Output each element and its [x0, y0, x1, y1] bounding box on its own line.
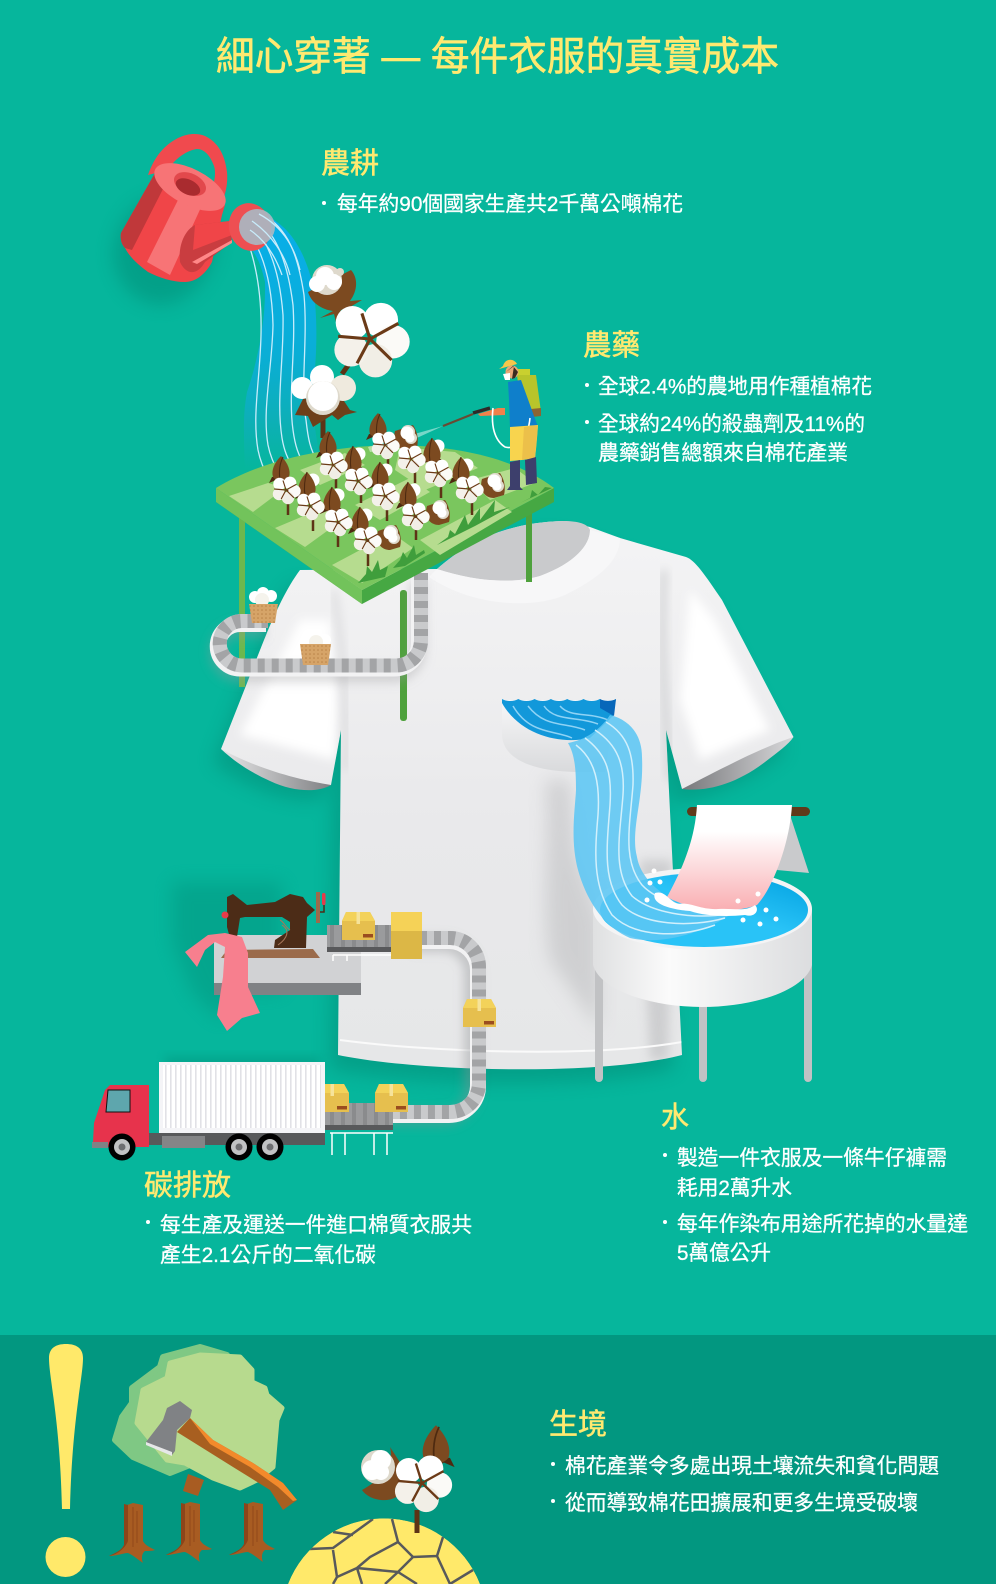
section: pesticide text [583, 329, 872, 465]
icon: exclamation mark [46, 1344, 86, 1577]
axe handle [177, 1418, 297, 1510]
cotton boll lower [291, 365, 357, 427]
right sleeve cuff [682, 737, 794, 790]
icon: stumps [109, 1502, 275, 1563]
spray mist [368, 426, 443, 452]
icon: cracked earth [288, 1518, 480, 1584]
cotton plants in field [269, 413, 505, 566]
section: carbon text: 碳排放 [144, 1169, 231, 1202]
section: habitat text: 棉花產業令多處出現土壤流失和貧化問題 [565, 1455, 939, 1478]
back cloth flap [777, 815, 809, 873]
can handle [148, 134, 227, 200]
section: habitat text: 從而導致棉花田擴展和更多生境受破壞 [565, 1492, 918, 1515]
grass tufts [358, 487, 552, 583]
icon: cotton on earth [361, 1425, 455, 1533]
section: farming text: 每年約90個國家生產共2千萬公噸棉花 [337, 193, 683, 216]
large cotton plants [291, 265, 410, 438]
section: water text: 水 [661, 1101, 689, 1134]
section: farming text [321, 147, 683, 216]
foam [644, 868, 778, 926]
belt and boxes top [327, 912, 422, 961]
sewing table and machine [172, 882, 361, 1022]
rod [687, 807, 810, 816]
pocket with water [502, 699, 616, 772]
icon: watering can [113, 134, 300, 305]
field stripes [229, 447, 535, 583]
box on vertical belt [463, 999, 496, 1027]
can body [121, 173, 225, 282]
can rose [224, 198, 276, 256]
basket 2 [300, 630, 331, 665]
truck [92, 1056, 325, 1160]
field platform [216, 445, 554, 604]
field legs [239, 505, 532, 721]
conveyor: packing [385, 938, 479, 1118]
section: carbon text: 每生產及運送一件進口棉質衣服共 [160, 1214, 472, 1237]
pink cloth on machine [185, 933, 260, 1031]
basin legs [595, 955, 812, 1082]
t-shirt [213, 521, 794, 1083]
water stream from pocket [568, 715, 733, 940]
section: pesticide text: 全球2.4%的農地用作種植棉花 [598, 376, 872, 398]
farmer [443, 360, 541, 490]
section: water text [661, 1101, 968, 1265]
section: habitat text: 生境 [549, 1408, 607, 1441]
bottom band [0, 1335, 996, 1584]
wash basin [593, 807, 812, 1082]
left sleeve cuff [221, 749, 331, 790]
section: water text: 5萬億公升 [677, 1242, 771, 1265]
pink cloth [667, 805, 792, 910]
neck opening [437, 521, 590, 581]
section: carbon text: 產生2.1公斤的二氧化碳 [160, 1244, 376, 1267]
section: pesticide text: 農藥 [583, 329, 640, 362]
belt and boxes bottom [316, 1084, 408, 1155]
basket 1 [249, 587, 278, 623]
collar [429, 530, 620, 603]
title: 細心穿著 — 每件衣服的真實成本 [216, 35, 779, 79]
section: water text: 每年作染布用途所花掉的水量達 [677, 1213, 968, 1236]
water stream from can [244, 212, 322, 474]
section: habitat text [549, 1408, 939, 1515]
section: farming text: 農耕 [321, 147, 379, 180]
axe head [146, 1401, 192, 1455]
cotton flower [334, 303, 410, 377]
section: pesticide text: 農藥銷售總額來自棉花產業 [598, 442, 848, 465]
conveyor: cotton [217, 573, 421, 674]
can spout [180, 221, 232, 272]
icon: tree and axe [115, 1347, 297, 1510]
can lid [147, 153, 233, 221]
section: water text: 製造一件衣服及一條牛仔褲需 [677, 1147, 947, 1170]
section: pesticide text: 全球約24%的殺蟲劑及11%的 [598, 413, 865, 436]
cotton boll top [308, 265, 362, 322]
section: water text: 耗用2萬升水 [677, 1177, 792, 1200]
section: carbon text [144, 1169, 472, 1267]
